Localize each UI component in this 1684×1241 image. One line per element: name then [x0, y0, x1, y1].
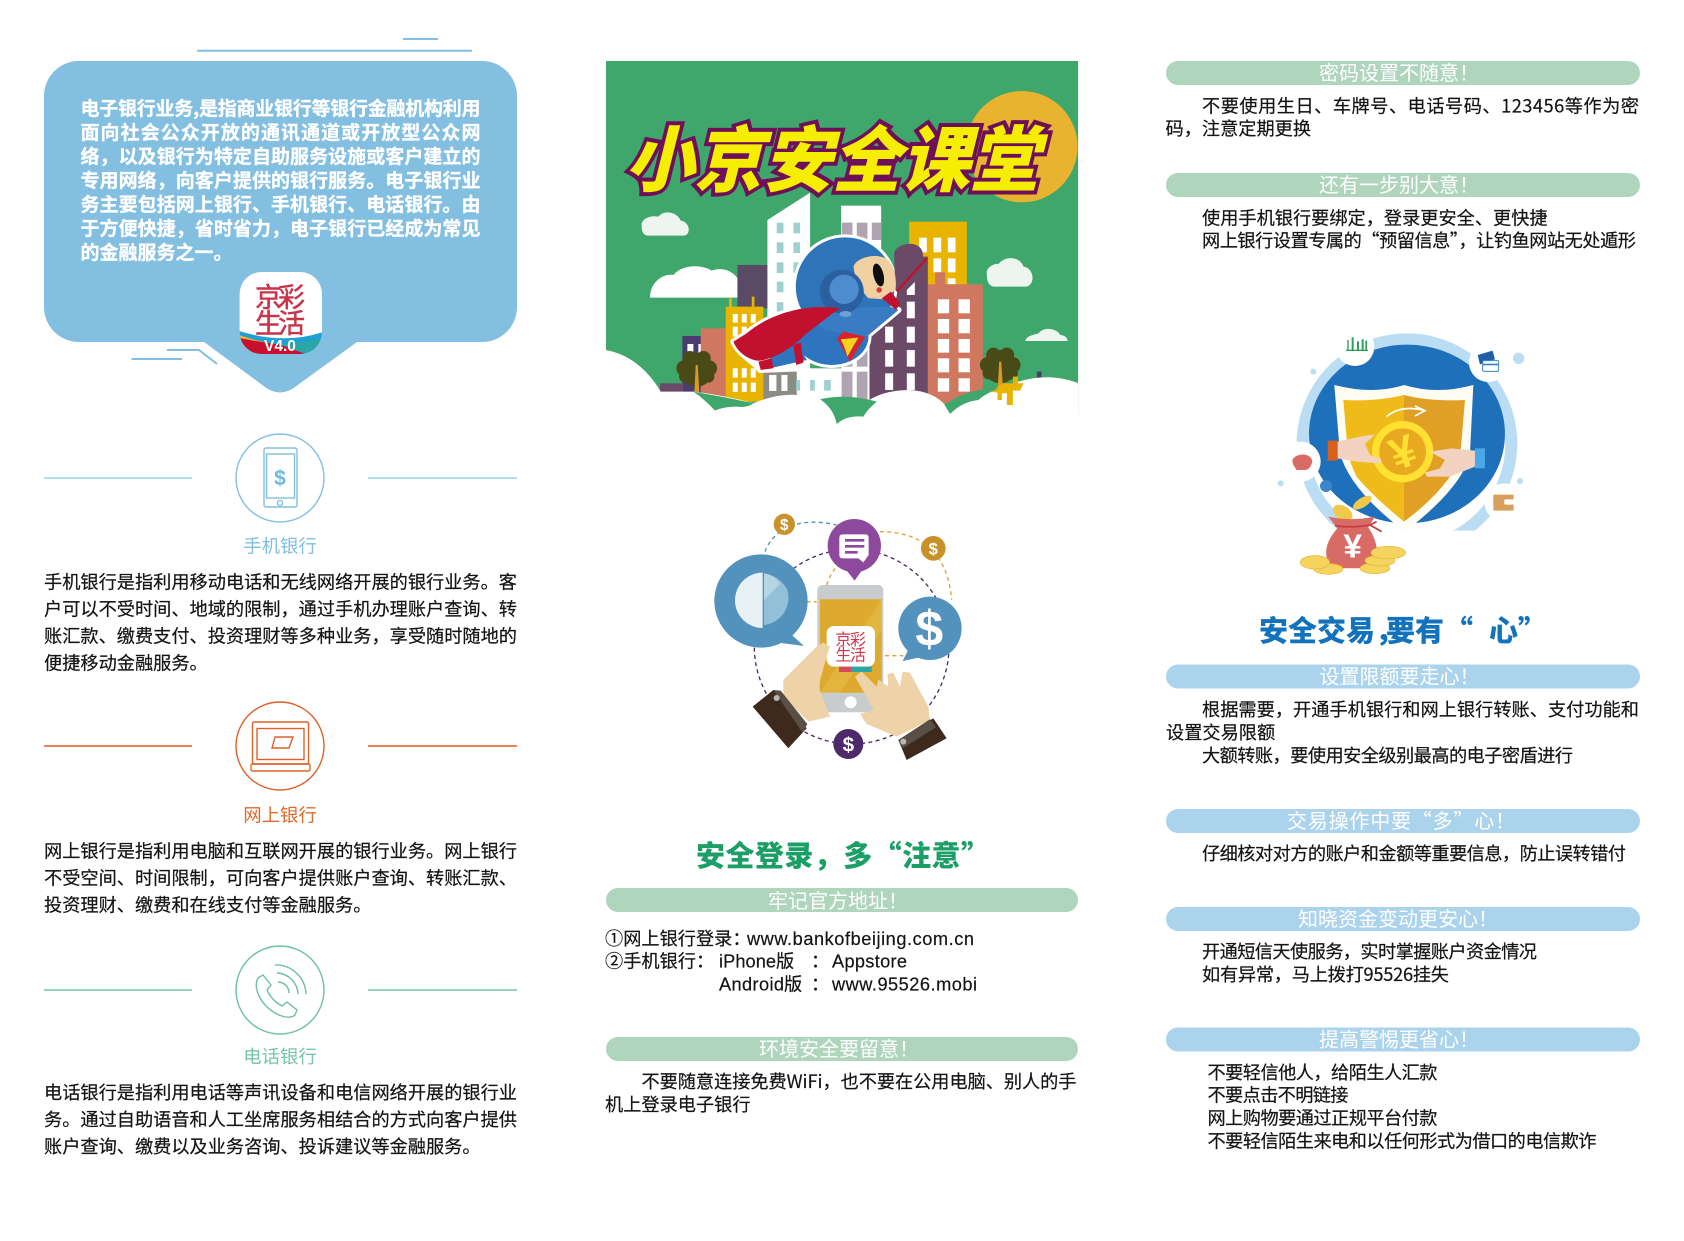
money bag with coins [1300, 493, 1406, 574]
bar: 交易操作中要“多”心: 交易操作中要“多”心！ [1287, 805, 1515, 834]
text: mobile banking description: 便捷移动金融服务。 [44, 650, 208, 676]
text: telephone banking description: 账户查询、缴费以及业务咨询、投诉建议等金融服务。 [44, 1133, 481, 1159]
mini icon: bar chart [1346, 337, 1368, 351]
text: limit tip: 设置交易限额 [1166, 719, 1275, 745]
text: binding tip: 网上银行设置专属的“预留信息”，让钓鱼网站无处遁形 [1202, 227, 1636, 253]
icon: laptop [236, 702, 324, 790]
panel: telephone banking [44, 946, 517, 1159]
green hills and white cloud foreground [606, 350, 1078, 424]
text: telephone banking description: 电话银行是指利用电话等声讯设备和电信网络开展的银行业 [44, 1079, 517, 1105]
heading: 安全交易，要有“心”: 要有 [1386, 608, 1444, 650]
bar: 设置限额要走心: 设置限额要走心！ [1320, 660, 1480, 690]
bar: 环境安全要留意 [606, 1033, 1078, 1062]
bar: 牢记官方地址: 牢记官方地址！ [768, 885, 908, 914]
heading: 安全交易，要有“心”: 安全交易， [1259, 608, 1404, 650]
text: mobile banking description: 账汇款、缴费支付、投资理财等多种业务，享受随时随地的 [44, 622, 517, 648]
hands exchanging yuan coin: ¥ [1382, 424, 1423, 480]
heading: 安全登录，多“注意”: 安全登录，多“注意” [696, 833, 990, 875]
text: official addresses: ②手机银行： [605, 948, 714, 974]
text: mobile banking description: 手机银行是指利用移动电话和无线网络开展的银行业务。客 [44, 568, 517, 594]
trees [676, 348, 1021, 393]
heading: 网上银行: 网上银行 [243, 802, 317, 828]
text: official addresses: 版 [784, 970, 802, 996]
illustration: security shield with yuan coin [1278, 327, 1530, 574]
text: password tip: 码，注意定期更换 [1166, 115, 1311, 141]
heading: 安全交易，要有“心”: 心 [1489, 608, 1518, 650]
text: official addresses: www.95526.mobi [831, 974, 977, 994]
panel: internet banking [44, 702, 517, 918]
gold coins: $ [780, 517, 789, 534]
text: notification tip [1202, 938, 1537, 987]
text: environment safety tip: 机上登录电子银行 [605, 1091, 751, 1117]
text: official addresses: www.bankofbeijing.com.cn [746, 929, 974, 949]
text: internet banking description: 投资理财、缴费和在线支付等金融服务。 [44, 892, 371, 918]
text: vigilance tips [1208, 1059, 1596, 1154]
bar: 提高警惕更省心 [1166, 1024, 1640, 1052]
bar: 环境安全要留意: 环境安全要留意！ [759, 1033, 919, 1062]
intro text: 络，以及银行为特定自助服务设施或客户建立的 [80, 142, 480, 169]
mini icon: wallet [1493, 495, 1514, 511]
text: environment safety tip: 不要随意连接免费WiFi，也不要在公用电脑、别人的手 [642, 1068, 1076, 1094]
heading: 安全交易，要有“心”: “ [1444, 608, 1473, 650]
text: official addresses [605, 925, 977, 996]
icon: mobile phone with dollar: $ [274, 467, 286, 490]
intro text: 务主要包括网上银行、手机银行、电话银行。由 [80, 190, 480, 217]
intro text: 专用网络，向客户提供的银行服务。电子银行业 [80, 166, 480, 193]
text: telephone banking description: 务。通过自助语音和人工坐席服务相结合的方式向客户提供 [44, 1106, 517, 1132]
message bubble [828, 519, 881, 581]
bar: 提高警惕更省心: 提高警惕更省心！ [1319, 1024, 1479, 1052]
text: limit tip [1166, 696, 1639, 768]
dollar bubble: $ [915, 601, 943, 657]
text: notification tip: 开通短信天使服务，实时掌握账户资金情况 [1202, 938, 1537, 964]
icon: app logo 京彩生活 V4.0 [239, 272, 323, 356]
text: official addresses: ： [811, 970, 829, 996]
mini icon: piggy bank [1292, 454, 1312, 470]
bar: 知晓资金变动更安心 [1166, 903, 1640, 932]
clouds [642, 212, 1068, 341]
intro text: 面向社会公众开放的通讯通道或开放型公众网 [80, 118, 480, 145]
icon: app logo 京彩生活 V4.0: V4.0 [264, 338, 296, 355]
chat bubble pie chart [714, 554, 808, 648]
shield [1334, 385, 1473, 532]
text: vigilance tips: 不要轻信他人，给陌生人汇款 [1208, 1059, 1438, 1085]
intro text: 的金融服务之一。 [80, 238, 233, 265]
smartphone: 京彩 [835, 626, 866, 650]
superhero mascot [733, 237, 927, 370]
text: binding tip: 使用手机银行要绑定，登录更安全、更快捷 [1202, 204, 1548, 230]
text: official addresses: Android [719, 974, 784, 994]
bar: 密码设置不随意 [1166, 57, 1640, 86]
bar: 密码设置不随意: 密码设置不随意！ [1319, 57, 1479, 86]
intro text: 电子银行业务,是指商业银行等银行金融机构利用 [80, 94, 480, 121]
purple coin: $ [843, 734, 855, 757]
bar: 牢记官方地址 [606, 885, 1078, 914]
text: limit tip: 根据需要，开通手机银行和网上银行转账、支付功能和 [1202, 696, 1639, 722]
panel: left column intro speech bubble [44, 39, 517, 392]
text: official addresses: ①网上银行登录： [605, 925, 751, 951]
text: vigilance tips: 不要轻信陌生来电和以任何形式为借口的电信欺诈 [1208, 1128, 1596, 1154]
heading: 电话银行: 电话银行 [243, 1043, 317, 1069]
text: environment safety tip [605, 1068, 1076, 1117]
hands [753, 643, 947, 760]
shield backdrop rings [1278, 327, 1530, 561]
text: binding tip [1202, 204, 1636, 253]
bar: 设置限额要走心 [1166, 660, 1640, 690]
heading: 安全交易，要有“心”: ” [1518, 608, 1547, 650]
text: notification tip: 如有异常，马上拨打95526挂失 [1202, 961, 1449, 987]
intro text: 于方便快捷，省时省力，电子银行已经成为常见 [80, 214, 480, 241]
text: limit tip: 大额转账，要使用安全级别最高的电子密盾进行 [1202, 742, 1573, 768]
text: password tip: 不要使用生日、车牌号、电话号码、123456等作为密 [1202, 92, 1639, 118]
text: internet banking description: 不受空间、时间限制，可向客户提供账户查询、转账汇款、 [44, 864, 517, 890]
dollar bubble [898, 597, 962, 661]
panel: hero illustration 小京安全课堂 [606, 61, 1078, 443]
icon: app logo 京彩生活 V4.0: 生活 [255, 302, 305, 341]
intro text [80, 94, 480, 265]
illustration: hands holding phone with finance icons [714, 514, 962, 760]
bar: 交易操作中要“多”心 [1166, 805, 1640, 834]
text: transaction tip: 仔细核对对方的账户和金额等重要信息，防止误转错付 [1202, 840, 1626, 866]
gold coins [774, 514, 946, 561]
dashed connector rings [754, 522, 952, 744]
smartphone [817, 585, 883, 712]
city buildings [660, 193, 1042, 403]
smartphone: 生活 [835, 642, 866, 666]
icon: telephone handset [236, 946, 324, 1034]
heading: 手机银行: 手机银行 [243, 532, 317, 558]
text: mobile banking description [44, 568, 517, 676]
bar: 还有一步别大意 [1166, 169, 1640, 198]
money bag with coins: ¥ [1343, 528, 1362, 565]
text: official addresses: 版 [776, 948, 794, 974]
purple coin [833, 729, 863, 759]
text: telephone banking description [44, 1079, 517, 1159]
text: official addresses: ： [811, 948, 829, 974]
text: official addresses: iPhone [719, 952, 776, 972]
bar: 知晓资金变动更安心: 知晓资金变动更安心！ [1298, 903, 1498, 932]
text: vigilance tips: 不要点击不明链接 [1208, 1082, 1348, 1108]
text: vigilance tips: 网上购物要通过正规平台付款 [1208, 1104, 1438, 1130]
hands exchanging yuan coin [1328, 421, 1485, 482]
bar: 还有一步别大意: 还有一步别大意！ [1319, 169, 1479, 198]
text: official addresses: Appstore [832, 952, 907, 972]
panel: mobile banking [44, 434, 517, 676]
gold coins: $ [929, 540, 939, 559]
text: mobile banking description: 户可以不受时间、地域的限制，通过手机办理账户查询、转 [44, 596, 517, 622]
text: password tip [1166, 92, 1639, 141]
mini icon: bank cards [1478, 351, 1499, 371]
text: internet banking description [44, 838, 517, 918]
title: 小京安全课堂: 小京安全课堂 [620, 103, 1059, 206]
icon: app logo 京彩生活 V4.0: 京彩 [255, 276, 305, 315]
text: internet banking description: 网上银行是指利用电脑和互联网开展的银行业务。网上银行 [44, 838, 517, 864]
icon: mobile phone with dollar [236, 434, 324, 522]
